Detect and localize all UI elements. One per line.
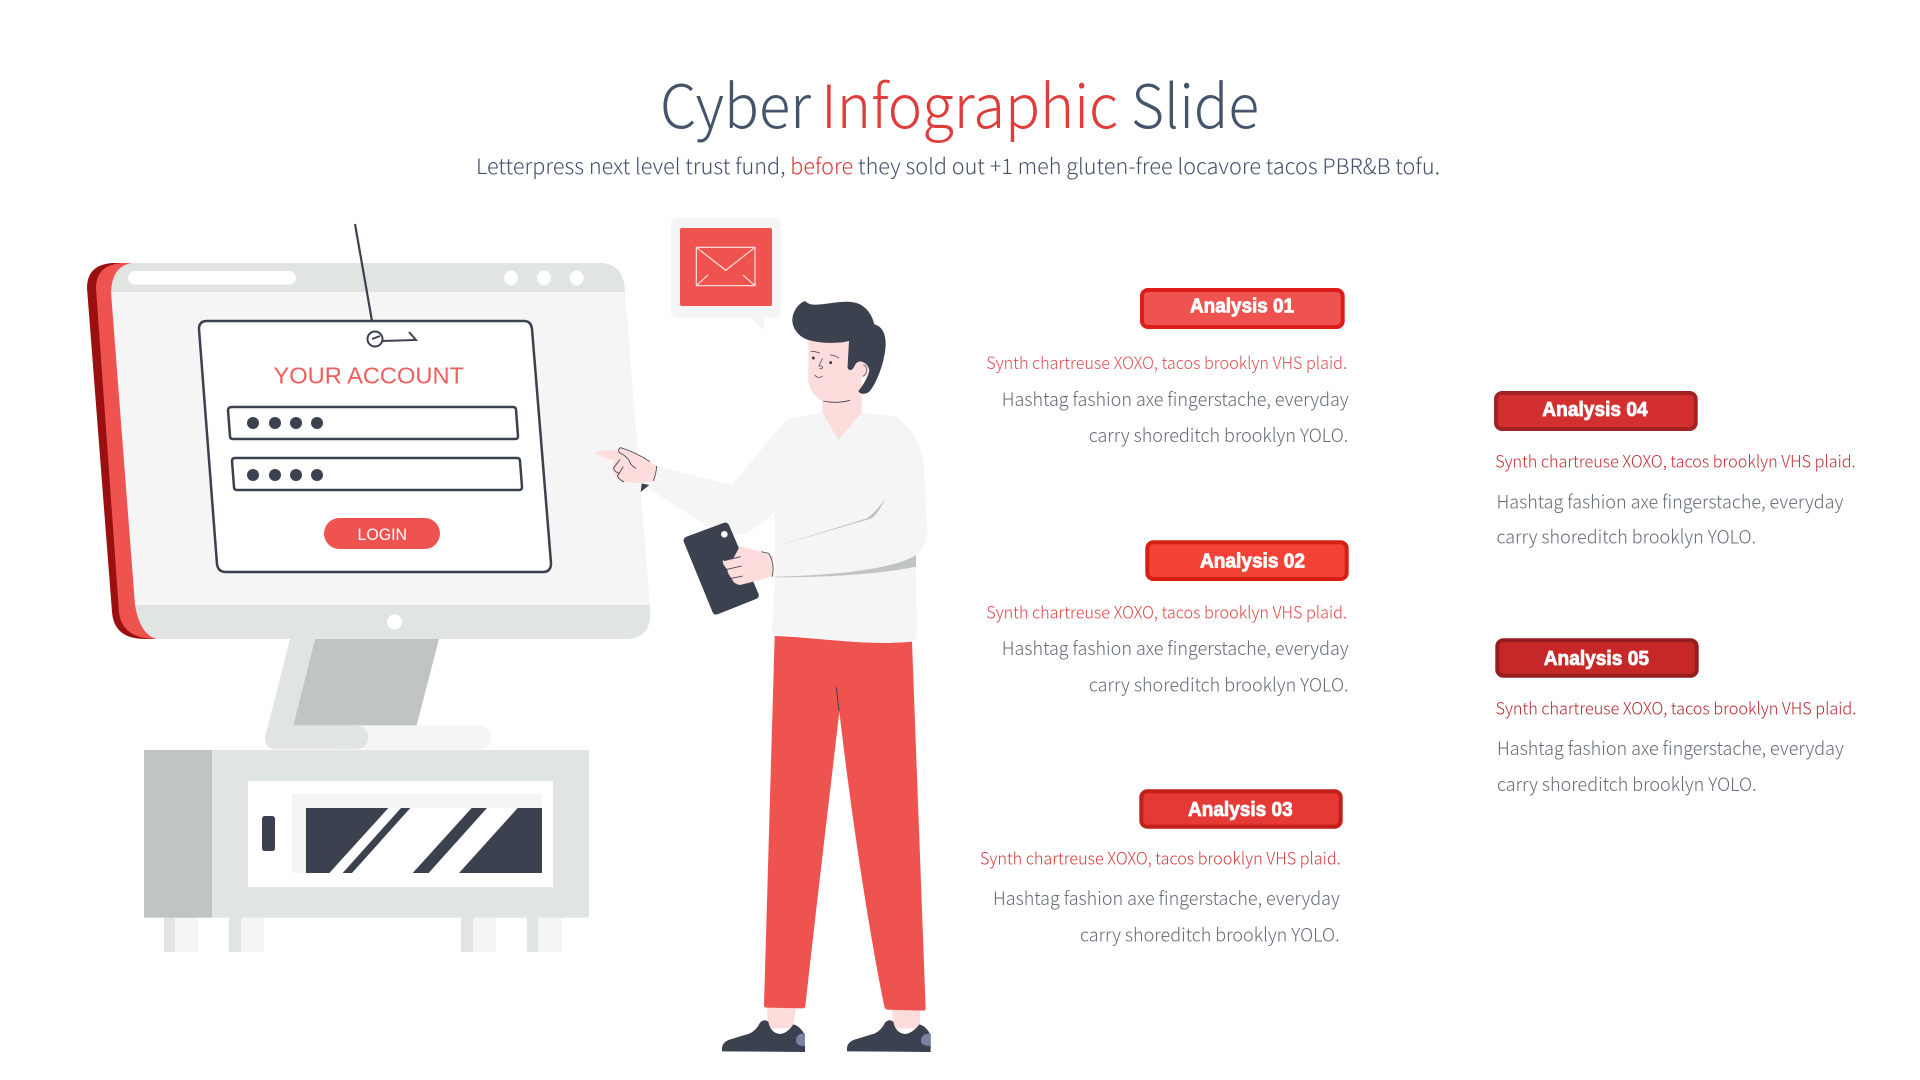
- body text: Hashtag fashion axe fingerstache, everyday: [1002, 634, 1349, 661]
- red lead line: Synth chartreuse XOXO, tacos brooklyn VHS plaid.: [980, 846, 1341, 870]
- head: [792, 301, 886, 402]
- red lead line: Synth chartreuse XOXO, tacos brooklyn VHS plaid.: [986, 350, 1347, 374]
- illustration: computer on desk: [87, 224, 650, 952]
- red lead line: Synth chartreuse XOXO, tacos brooklyn VHS plaid.: [1495, 449, 1856, 473]
- badge: [1147, 542, 1347, 579]
- monitor: [87, 263, 650, 639]
- badge: [1497, 640, 1697, 676]
- body text: Hashtag fashion axe fingerstache, everyday: [1497, 734, 1844, 761]
- body text: Hashtag fashion axe fingerstache, everyday: [993, 884, 1340, 911]
- monitor stand: [265, 639, 491, 749]
- desk: [144, 750, 589, 952]
- panel: analysis 04: [1495, 393, 1856, 550]
- body text: carry shoreditch brooklyn YOLO.: [1089, 421, 1348, 448]
- title: Infographic: [821, 59, 1118, 146]
- body text: [1002, 385, 1349, 448]
- badge: Analysis 03: [1188, 799, 1293, 821]
- ear: [854, 363, 869, 377]
- panel: analysis 05: [1496, 640, 1856, 797]
- hair: [792, 301, 886, 394]
- badge: Analysis 02: [1200, 550, 1305, 572]
- badge: [1142, 290, 1343, 327]
- body text: carry shoreditch brooklyn YOLO.: [1497, 770, 1757, 797]
- speech bubble with mail icon: [671, 218, 781, 331]
- body text: [1496, 487, 1843, 550]
- pointing hand: [595, 447, 657, 492]
- input: password: [232, 458, 522, 490]
- face: [808, 337, 862, 402]
- body text: carry shoreditch brooklyn YOLO.: [1496, 523, 1756, 550]
- login button: LOGIN: [358, 526, 407, 544]
- title: Slide: [1131, 59, 1259, 146]
- badge: [1496, 393, 1696, 429]
- neck: [822, 393, 862, 440]
- badge: Analysis 01: [1190, 296, 1294, 318]
- body text: carry shoreditch brooklyn YOLO.: [1080, 920, 1340, 947]
- badge: Analysis 04: [1542, 399, 1649, 421]
- tablet: [684, 523, 759, 615]
- icon: key: [368, 332, 416, 346]
- fishing line: [355, 224, 372, 321]
- illustration: person: [595, 301, 931, 1052]
- red lead line: Synth chartreuse XOXO, tacos brooklyn VHS plaid.: [1496, 695, 1856, 719]
- trousers: [722, 636, 931, 1052]
- body text: [993, 884, 1340, 947]
- login heading: YOUR ACCOUNT: [274, 362, 464, 388]
- subtitle: Letterpress next level trust fund, before they sold out +1 meh gluten-free locavore tacos PBR&B tofu.: [476, 150, 1440, 181]
- holding hand: [723, 546, 773, 585]
- ankles: [767, 1003, 920, 1028]
- login panel: [199, 321, 551, 572]
- shirt: [648, 412, 927, 643]
- facial features: [811, 352, 867, 402]
- torso and arms: [595, 393, 927, 643]
- panel: analysis 03: [980, 791, 1341, 947]
- panel: analysis 01: [986, 290, 1349, 448]
- browser address pill: [128, 271, 296, 284]
- body text: Hashtag fashion axe fingerstache, everyday: [1002, 385, 1349, 412]
- panel: analysis 02: [986, 542, 1349, 697]
- title: Cyber: [660, 59, 811, 146]
- body text: Hashtag fashion axe fingerstache, everyday: [1496, 487, 1843, 514]
- body text: carry shoreditch brooklyn YOLO.: [1089, 670, 1348, 697]
- badge: Analysis 05: [1544, 648, 1649, 670]
- browser window dots: [504, 270, 584, 286]
- shirt folds: [774, 498, 916, 577]
- icon: envelope: [696, 247, 755, 286]
- title: [660, 59, 1259, 146]
- monitor power dot: [387, 614, 402, 630]
- input: username: [228, 407, 518, 439]
- login button: [324, 518, 440, 549]
- badge: [1141, 791, 1341, 827]
- body text: [1497, 734, 1844, 797]
- body text: [1002, 634, 1349, 697]
- shoes: [722, 1020, 931, 1052]
- red lead line: Synth chartreuse XOXO, tacos brooklyn VHS plaid.: [986, 599, 1347, 623]
